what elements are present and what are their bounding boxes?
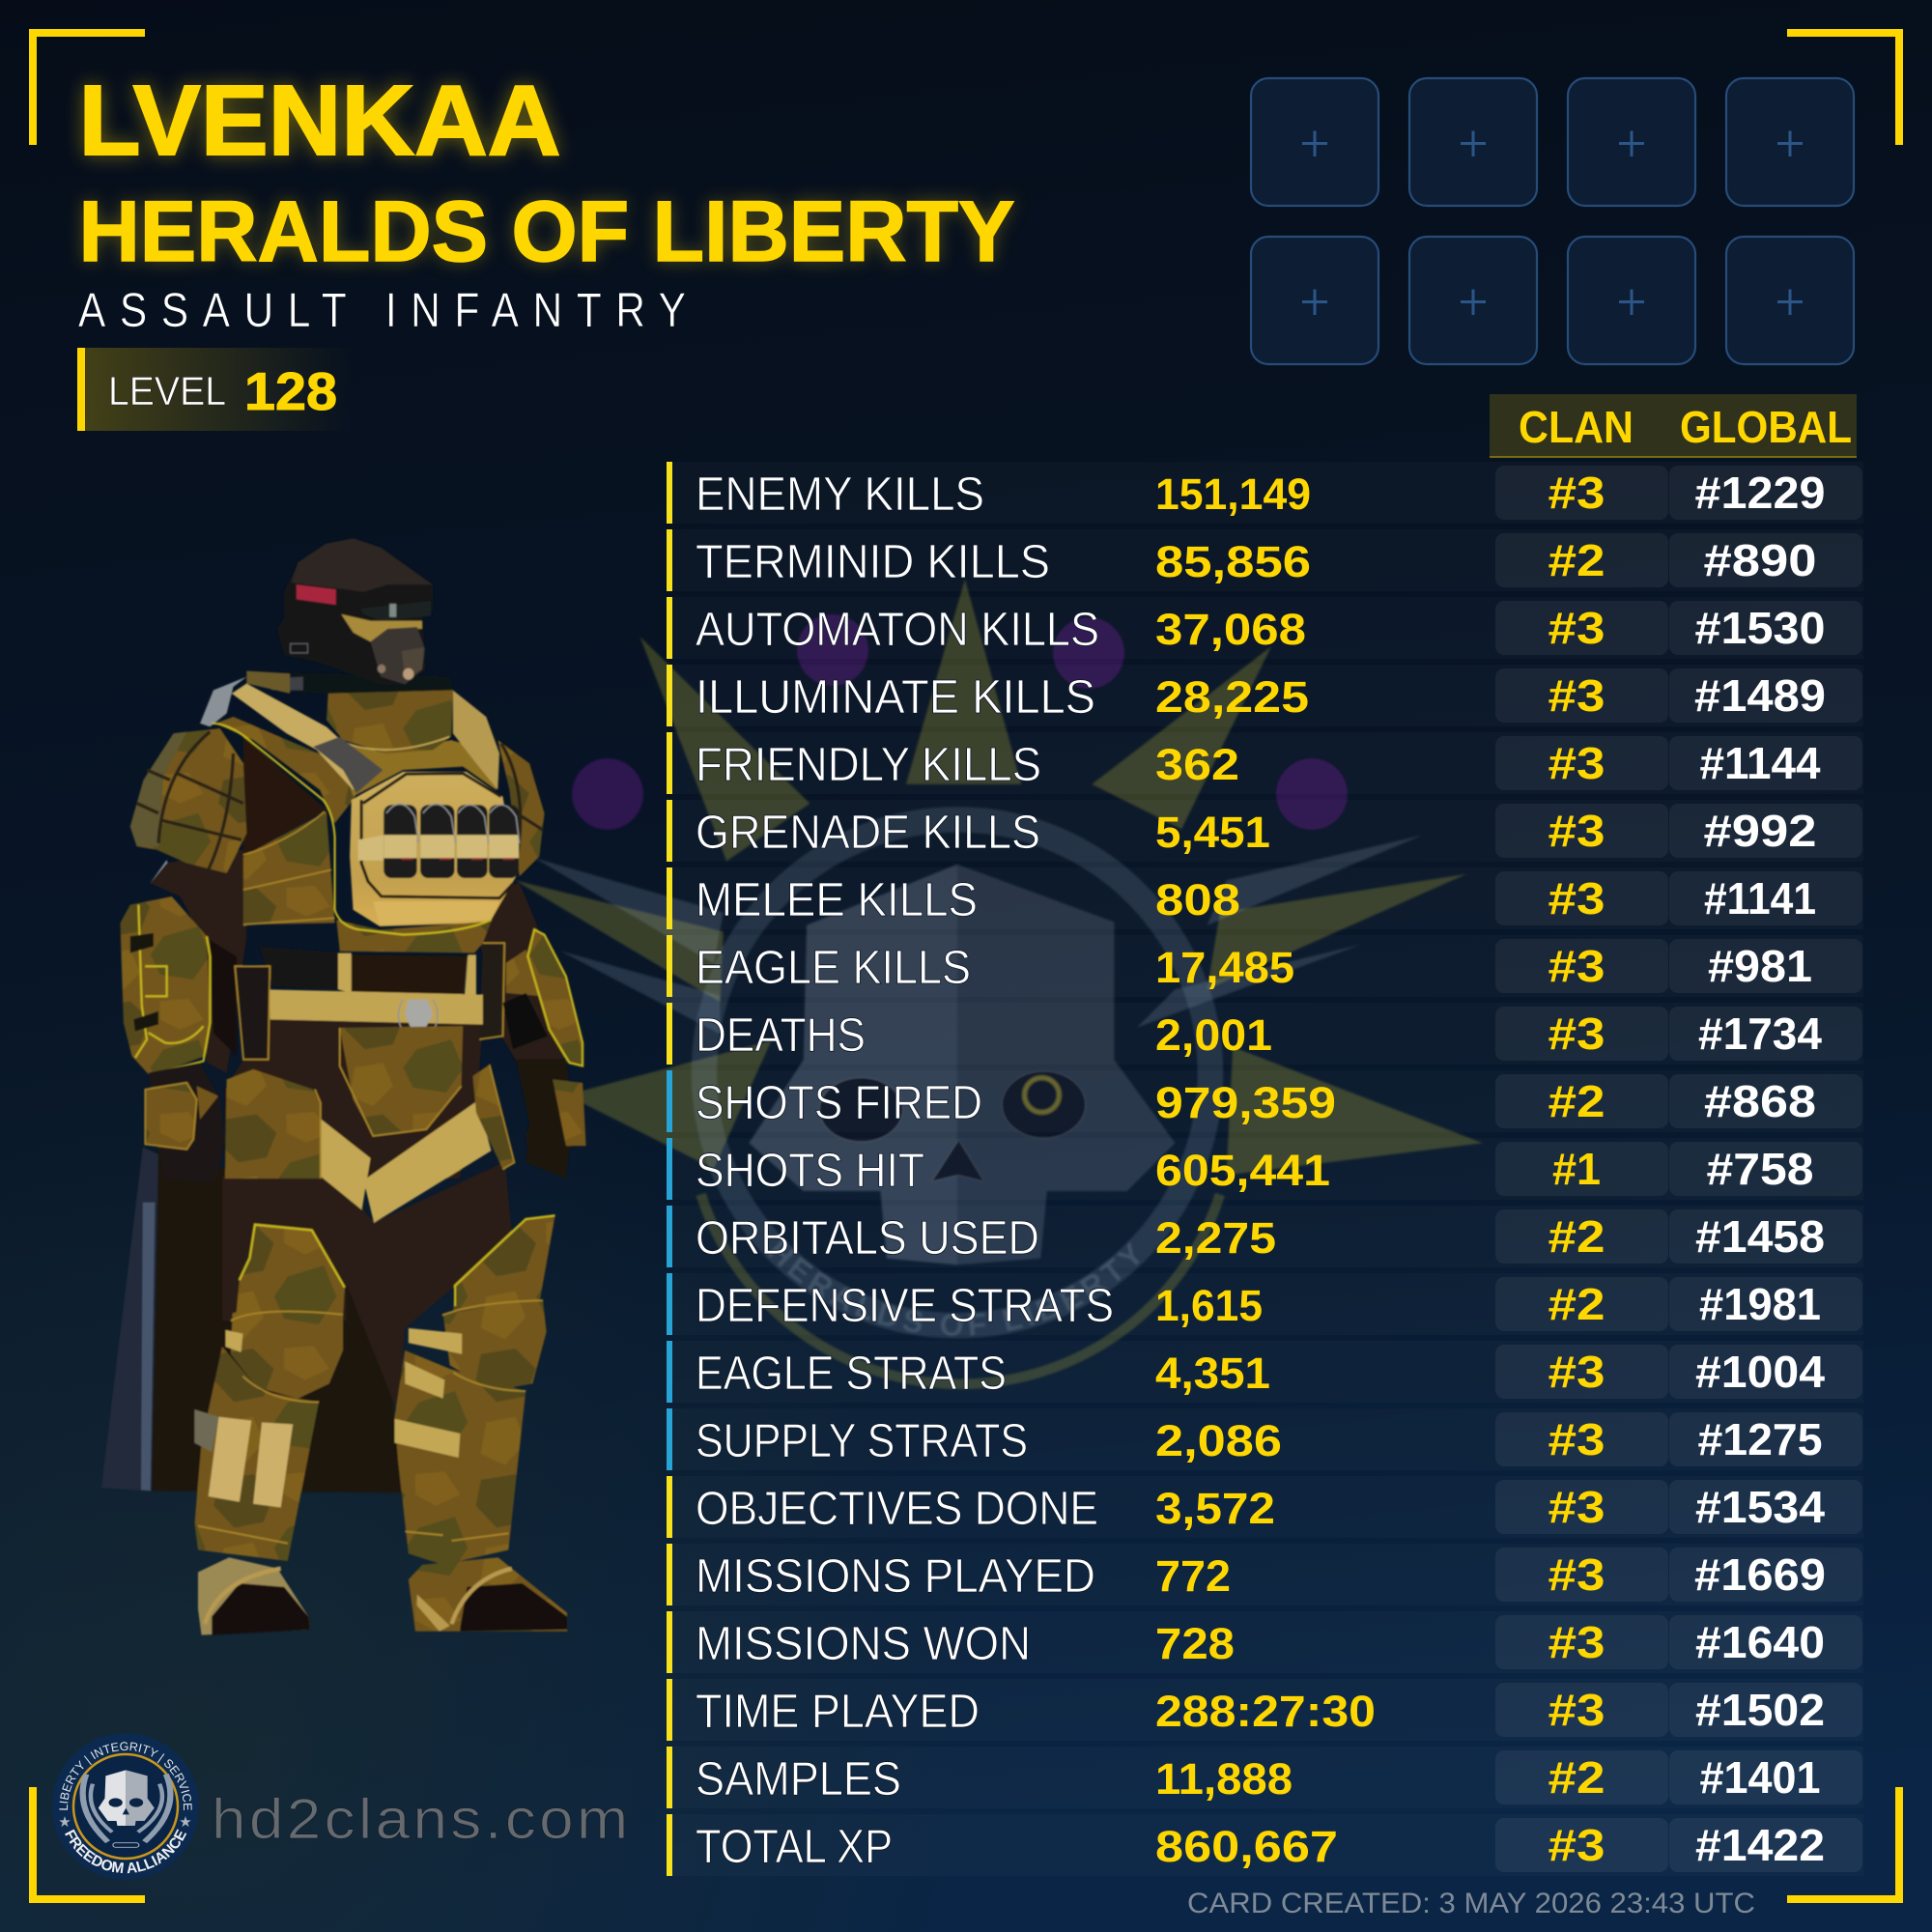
row: melee kills: #3 — [1548, 873, 1605, 923]
row: melee kills: #1141 — [1704, 873, 1816, 923]
card created timestamp: CARD CREATED: 3 MAY 2026 23:43 UTC — [1187, 1888, 1755, 1919]
row: shots hit — [667, 1138, 1863, 1200]
row: defensive strats: #1981 — [1699, 1279, 1821, 1329]
corner bracket: bottom left — [29, 1787, 145, 1903]
corner bracket: top right — [1787, 29, 1903, 145]
logo: freedom alliance badge — [52, 1733, 199, 1880]
row: enemy kills: #3 — [1548, 468, 1605, 518]
row: missions played: 772 — [1155, 1551, 1231, 1601]
row: time played — [667, 1679, 1863, 1741]
row: automaton kills — [667, 597, 1863, 659]
corner bracket: top left — [29, 29, 145, 145]
logo: freedom alliance badge: ★ — [179, 1813, 192, 1831]
row: shots hit: SHOTS HIT — [696, 1145, 924, 1197]
row: shots fired: 979,359 — [1155, 1078, 1336, 1127]
row: orbitals used: #2 — [1548, 1211, 1605, 1262]
level badge: LEVEL — [108, 368, 226, 413]
row: deaths: DEATHS — [696, 1009, 866, 1062]
row: missions won: #3 — [1548, 1617, 1605, 1667]
row: deaths — [667, 1003, 1863, 1065]
row: deaths: #1734 — [1698, 1009, 1822, 1059]
logo: freedom alliance badge: FREEDOM ALLIANCE — [65, 1829, 187, 1874]
logo: freedom alliance badge: ★ — [58, 1813, 71, 1831]
row: orbitals used: ORBITALS USED — [696, 1212, 1039, 1264]
row: missions won: 728 — [1155, 1619, 1235, 1668]
row: samples: SAMPLES — [696, 1753, 901, 1805]
row: shots fired: #2 — [1548, 1076, 1605, 1126]
row: eagle kills: #981 — [1708, 941, 1812, 991]
row: total xp: 860,667 — [1155, 1822, 1338, 1871]
row: missions won: #1640 — [1695, 1617, 1825, 1667]
row: illuminate kills: 28,225 — [1155, 672, 1309, 722]
row: time played: #3 — [1548, 1685, 1605, 1735]
row: missions played: MISSIONS PLAYED — [696, 1550, 1095, 1603]
row: defensive strats: DEFENSIVE STRATS — [696, 1280, 1114, 1332]
level badge: 128 — [244, 361, 337, 421]
watermark: clan emblem — [517, 580, 1482, 1390]
row: samples: #1401 — [1700, 1752, 1820, 1803]
row: orbitals used — [667, 1206, 1863, 1267]
row: orbitals used: 2,275 — [1155, 1213, 1276, 1263]
row: automaton kills: #3 — [1548, 603, 1605, 653]
row: automaton kills: 37,068 — [1155, 605, 1306, 654]
row: eagle strats — [667, 1341, 1863, 1403]
row: objectives done: 3,572 — [1155, 1484, 1275, 1533]
title: player name: LVENKAA — [79, 65, 560, 176]
row: illuminate kills: #1489 — [1694, 670, 1826, 721]
row: time played: TIME PLAYED — [696, 1686, 980, 1738]
row: shots hit: #1 — [1552, 1144, 1601, 1194]
row: missions played: #1669 — [1694, 1549, 1826, 1600]
row: eagle strats: 4,351 — [1155, 1349, 1270, 1398]
row: enemy kills: ENEMY KILLS — [696, 469, 984, 521]
row: supply strats: SUPPLY STRATS — [696, 1415, 1028, 1467]
corner bracket: bottom right — [1787, 1787, 1903, 1903]
row: friendly kills: #1144 — [1700, 738, 1821, 788]
player character: armored soldier — [101, 538, 586, 1635]
table header: clan and global — [1490, 394, 1857, 458]
row: grenade kills: GRENADE KILLS — [696, 807, 1040, 859]
row: eagle strats: #3 — [1548, 1347, 1605, 1397]
row: samples: 11,888 — [1155, 1754, 1293, 1804]
row: samples — [667, 1747, 1863, 1808]
level badge — [77, 348, 353, 431]
row: eagle kills: #3 — [1548, 941, 1605, 991]
row: supply strats: #1275 — [1698, 1414, 1822, 1464]
subtitle: class: ASSAULT INFANTRY — [78, 283, 686, 337]
row: deaths: 2,001 — [1155, 1010, 1272, 1060]
row: total xp: #3 — [1548, 1820, 1605, 1870]
row: defensive strats — [667, 1273, 1863, 1335]
heading: clan name: HERALDS OF LIBERTY — [79, 183, 1014, 279]
row: enemy kills: 151,149 — [1155, 469, 1311, 519]
table header: clan and global: GLOBAL — [1680, 402, 1852, 452]
row: objectives done: #3 — [1548, 1482, 1605, 1532]
row: eagle kills: 17,485 — [1155, 943, 1294, 992]
row: orbitals used: #1458 — [1695, 1211, 1825, 1262]
row: grenade kills: 5,451 — [1155, 808, 1270, 857]
row: friendly kills: #3 — [1548, 738, 1605, 788]
watermark: clan emblem: HERALDS OF LIBERTY — [767, 1240, 1140, 1337]
row: supply strats: 2,086 — [1155, 1416, 1282, 1465]
row: time played: #1502 — [1695, 1685, 1825, 1735]
row: illuminate kills — [667, 665, 1863, 726]
row: shots hit: 605,441 — [1155, 1146, 1330, 1195]
table header: clan and global: CLAN — [1519, 402, 1634, 452]
row: objectives done: OBJECTIVES DONE — [696, 1483, 1098, 1535]
row: enemy kills — [667, 462, 1863, 524]
website text: hd2clans.com — [212, 1788, 628, 1850]
row: melee kills: 808 — [1155, 875, 1240, 924]
row: automaton kills: #1530 — [1694, 603, 1826, 653]
row: time played: 288:27:30 — [1155, 1687, 1376, 1736]
row: illuminate kills: ILLUMINATE KILLS — [696, 671, 1095, 724]
row: eagle kills — [667, 935, 1863, 997]
row: defensive strats: 1,615 — [1155, 1281, 1263, 1330]
row: shots fired: SHOTS FIRED — [696, 1077, 982, 1129]
row: grenade kills: #992 — [1704, 806, 1816, 856]
row: total xp — [667, 1814, 1863, 1876]
row: objectives done — [667, 1476, 1863, 1538]
row: grenade kills — [667, 800, 1863, 862]
row: terminid kills: #890 — [1704, 535, 1816, 585]
row: shots fired: #868 — [1704, 1076, 1816, 1126]
row: shots hit: #758 — [1706, 1144, 1814, 1194]
row: total xp: TOTAL XP — [696, 1821, 893, 1873]
row: friendly kills: 362 — [1155, 740, 1239, 789]
badge slots grid — [1251, 78, 1854, 364]
row: eagle kills: EAGLE KILLS — [696, 942, 971, 994]
row: deaths: #3 — [1548, 1009, 1605, 1059]
row: defensive strats: #2 — [1548, 1279, 1605, 1329]
row: terminid kills: 85,856 — [1155, 537, 1311, 586]
row: missions played: #3 — [1548, 1549, 1605, 1600]
row: shots fired — [667, 1070, 1863, 1132]
row: eagle strats: EAGLE STRATS — [696, 1348, 1007, 1400]
row: supply strats — [667, 1408, 1863, 1470]
row: eagle strats: #1004 — [1695, 1347, 1825, 1397]
row: samples: #2 — [1548, 1752, 1605, 1803]
row: enemy kills: #1229 — [1694, 468, 1826, 518]
row: melee kills: MELEE KILLS — [696, 874, 978, 926]
row: friendly kills — [667, 732, 1863, 794]
row: supply strats: #3 — [1548, 1414, 1605, 1464]
row: terminid kills: TERMINID KILLS — [696, 536, 1050, 588]
row: missions won: MISSIONS WON — [696, 1618, 1031, 1670]
row: objectives done: #1534 — [1695, 1482, 1825, 1532]
row: missions played — [667, 1544, 1863, 1605]
row: melee kills — [667, 867, 1863, 929]
row: illuminate kills: #3 — [1548, 670, 1605, 721]
row: friendly kills: FRIENDLY KILLS — [696, 739, 1041, 791]
row: grenade kills: #3 — [1548, 806, 1605, 856]
row: terminid kills: #2 — [1548, 535, 1605, 585]
row: terminid kills — [667, 529, 1863, 591]
logo: freedom alliance badge: LIBERTY | INTEGRITY | SERVICE — [59, 1742, 192, 1810]
row: missions won — [667, 1611, 1863, 1673]
row: total xp: #1422 — [1695, 1820, 1825, 1870]
row: automaton kills: AUTOMATON KILLS — [696, 604, 1099, 656]
